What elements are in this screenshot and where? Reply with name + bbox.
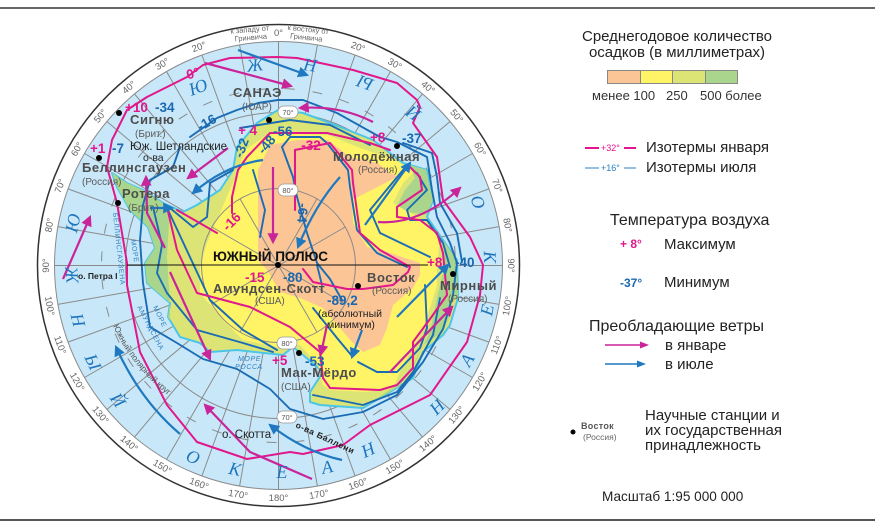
station names: Ротера — [122, 186, 170, 201]
prevailing winds in January — [63, 63, 460, 479]
ocean name — [61, 54, 500, 482]
station names: Амундсен-Скотт — [213, 281, 325, 296]
ocean name: А — [319, 456, 335, 478]
degree labels: 120° — [67, 371, 86, 393]
station names: (Россия) — [448, 294, 487, 305]
degree labels: Гринвича — [234, 32, 268, 43]
degree labels: 30° — [386, 56, 404, 73]
station names: Молодёжная — [333, 149, 420, 164]
ocean name: Н — [357, 438, 379, 462]
degree labels: 60° — [471, 141, 488, 159]
ocean name: К — [480, 250, 500, 264]
heading: South Pole: ЮЖНЫЙ ПОЛЮС — [213, 249, 328, 264]
seas and polar circle labels: МОРЕ — [151, 305, 167, 329]
parallel labels: 70° — [281, 413, 293, 422]
isotherm labels: -32 — [231, 136, 252, 160]
temperature values: +8 — [370, 130, 386, 145]
legend: air temperature: + 8° — [620, 237, 642, 251]
degree labels: 160° — [347, 476, 369, 493]
legend: isotherms — [585, 139, 769, 176]
ocean name: Е — [476, 303, 498, 318]
legend: prevailing winds — [589, 318, 764, 373]
ocean name: Ю — [185, 74, 211, 100]
islands: о. Скотта — [222, 429, 272, 441]
islands: о-ва — [143, 152, 164, 164]
legend: isotherms: +32° — [601, 143, 620, 153]
islands: о. Петра I — [78, 271, 117, 281]
temperature values: -34 — [155, 100, 175, 115]
degree labels: 0° — [274, 28, 283, 39]
degree labels: 50° — [447, 107, 465, 126]
legend: isotherms: Изотермы января — [646, 139, 769, 156]
ocean name: Ы — [353, 70, 377, 95]
station names: (Россия) — [372, 286, 411, 297]
isotherm labels — [185, 65, 321, 234]
station names — [82, 85, 497, 393]
seas and polar circle labels: МОРЕ — [129, 239, 139, 263]
prevailing winds in July — [116, 50, 448, 460]
temperature values: -37 — [402, 131, 422, 146]
parallel labels — [277, 106, 298, 423]
legend: precipitation: Среднегодовое количество — [582, 28, 772, 45]
legend: isotherms: +16° — [601, 163, 620, 173]
temperature values: -80 — [283, 270, 303, 285]
ocean name: Ю — [61, 211, 85, 235]
degree labels: 140° — [118, 433, 140, 455]
meridian line through the pole — [127, 264, 428, 266]
ocean meridians — [54, 42, 502, 490]
degree labels: 170° — [227, 488, 249, 502]
seas and polar circle labels — [111, 212, 263, 394]
station names: (Брит.) — [135, 129, 166, 140]
degree labels: 150° — [384, 458, 406, 477]
legend: air temperature: -37° — [620, 276, 642, 290]
degree labels: 60° — [69, 140, 86, 158]
scale: Масштаб 1:95 000 000 — [602, 489, 744, 504]
seas and polar circle labels: БЕЛЛИНСГАУЗЕНА — [111, 212, 126, 285]
islands — [78, 141, 356, 456]
ocean name: Н — [301, 54, 319, 76]
legend: precipitation — [582, 28, 772, 103]
temperature values: -7 — [112, 141, 124, 156]
degree labels: 20° — [191, 40, 208, 55]
ocean name: Ж — [245, 54, 266, 76]
circle 80 and interior meridians — [202, 188, 356, 342]
station names: (США) — [255, 296, 285, 307]
ocean name: О — [466, 193, 490, 211]
temperature values: -89,2 — [327, 293, 358, 308]
temperature values: -15 — [245, 270, 265, 285]
legend: research stations: их государственная — [645, 422, 782, 439]
degree labels: 100° — [42, 295, 56, 317]
degree labels: Гринвича — [290, 31, 324, 44]
degree labels: к востоку от — [287, 23, 330, 36]
legend: research stations: Научные станции и — [645, 407, 780, 424]
map: Antarctica polar projection — [36, 23, 520, 508]
seas and polar circle labels: МОРЕ — [238, 356, 261, 363]
degree labels: 130° — [446, 404, 468, 426]
degree labels: 80° — [500, 217, 514, 233]
islands: о-ва Баллени — [294, 420, 356, 456]
ocean name: К — [226, 458, 244, 480]
ocean name: О — [183, 445, 203, 469]
degree labels: 160° — [188, 476, 210, 493]
parallel labels: 80° — [281, 339, 293, 348]
degree labels: 130° — [89, 404, 111, 426]
legend: isotherms: Изотермы июля — [646, 159, 756, 176]
temperature values: + 4 — [238, 123, 258, 138]
parallel labels: 70° — [282, 108, 294, 117]
temperature values: +10 — [125, 100, 148, 115]
legend: prevailing winds: Преобладающие ветры — [589, 318, 764, 335]
ocean name: Ж — [61, 265, 83, 286]
temperature values: (абсолютный — [318, 308, 382, 320]
parallel labels: 80° — [282, 186, 294, 195]
station names: Мирный — [440, 278, 497, 293]
seas and polar circle labels: Южный полярный круг — [113, 324, 171, 394]
temperature values: минимум) — [327, 319, 375, 331]
legend: air temperature: Минимум — [664, 274, 730, 291]
degree labels: 80° — [43, 217, 57, 233]
temperature values — [90, 100, 475, 369]
station dots — [96, 110, 456, 356]
degree labels — [41, 23, 516, 504]
graticule ring — [38, 24, 520, 506]
isotherm labels: -16 — [219, 209, 244, 234]
degree labels: 40° — [419, 79, 437, 97]
seas and polar circle labels: РОССА — [235, 364, 263, 371]
legend: prevailing winds: в январе — [665, 337, 726, 354]
degree labels: 90° — [41, 258, 52, 273]
legend: precipitation: 500 более — [700, 88, 762, 103]
ocean name: Ы — [80, 350, 106, 375]
station names: (США) — [281, 382, 311, 393]
legend: precipitation: менее 100 — [592, 88, 655, 103]
ocean name: Й — [401, 99, 426, 125]
isotherm labels: -16 — [195, 111, 219, 134]
station names: (Россия) — [82, 177, 121, 188]
degree labels: 50° — [92, 107, 110, 125]
ocean name: А — [455, 349, 479, 371]
degree labels: 20° — [349, 40, 367, 55]
legend: air temperature: Максимум — [664, 236, 736, 253]
continent: precipitation zones — [100, 110, 460, 408]
degree labels: 70° — [53, 177, 68, 195]
degree labels: 110° — [489, 334, 506, 356]
station names: Восток — [367, 270, 415, 285]
isotherm labels: -48 — [255, 132, 279, 157]
degree labels: 90° — [505, 258, 516, 273]
ocean name: Й — [106, 387, 132, 412]
temperature values: -53 — [305, 354, 325, 369]
degree labels: 120° — [471, 371, 490, 393]
station names: Беллинсгаузен — [82, 160, 186, 175]
legend: research stations: принадлежность — [645, 437, 761, 454]
station names: САНАЭ — [233, 85, 282, 100]
station names: (Россия) — [358, 165, 397, 176]
isotherms of January — [107, 57, 483, 459]
legend: prevailing winds: в июле — [665, 356, 714, 373]
degree labels: 40° — [120, 79, 139, 97]
degree labels: 100° — [501, 295, 515, 317]
islands: Юж. Шетландские — [130, 141, 227, 153]
isotherm labels: -64 — [294, 203, 311, 224]
degree labels: 180° — [269, 493, 289, 504]
degree labels: к западу от — [230, 23, 270, 36]
legend: precipitation: 250 — [666, 88, 688, 103]
degree labels: 70° — [489, 178, 504, 195]
isotherm labels: -32 — [301, 138, 321, 153]
isotherms of July — [140, 100, 462, 419]
degree labels: 110° — [51, 334, 68, 356]
isotherm labels: 0° — [185, 65, 201, 82]
station names: (Брит.) — [128, 203, 159, 214]
station names: (ЮАР) — [242, 102, 272, 113]
legend: research stations — [570, 407, 782, 454]
temperature values: +8 — [427, 255, 443, 270]
seas and polar circle labels: АМУНДСЕНА — [135, 305, 165, 352]
legend: research stations: (Россия) — [583, 432, 617, 442]
temperature values: +5 — [272, 353, 288, 368]
degree labels: 150° — [151, 458, 173, 477]
ocean name: Н — [425, 395, 449, 419]
temperature values: +1 — [90, 141, 106, 156]
temperature values: -56 — [273, 124, 293, 139]
degree labels: 140° — [417, 433, 439, 455]
temperature values: -40 — [455, 255, 475, 270]
degree labels: 30° — [154, 56, 172, 73]
station names: Мак-Мёрдо — [281, 365, 357, 380]
legend: research stations: Восток — [581, 421, 614, 431]
legend: air temperature — [610, 212, 770, 291]
legend: air temperature: Температура воздуха — [610, 212, 770, 229]
degree labels: 170° — [308, 488, 330, 502]
ocean name: Е — [276, 462, 288, 482]
ocean name: Н — [66, 310, 90, 330]
station names: Сигню — [130, 112, 174, 127]
legend: precipitation: осадков (в миллиметрах) — [589, 44, 765, 61]
